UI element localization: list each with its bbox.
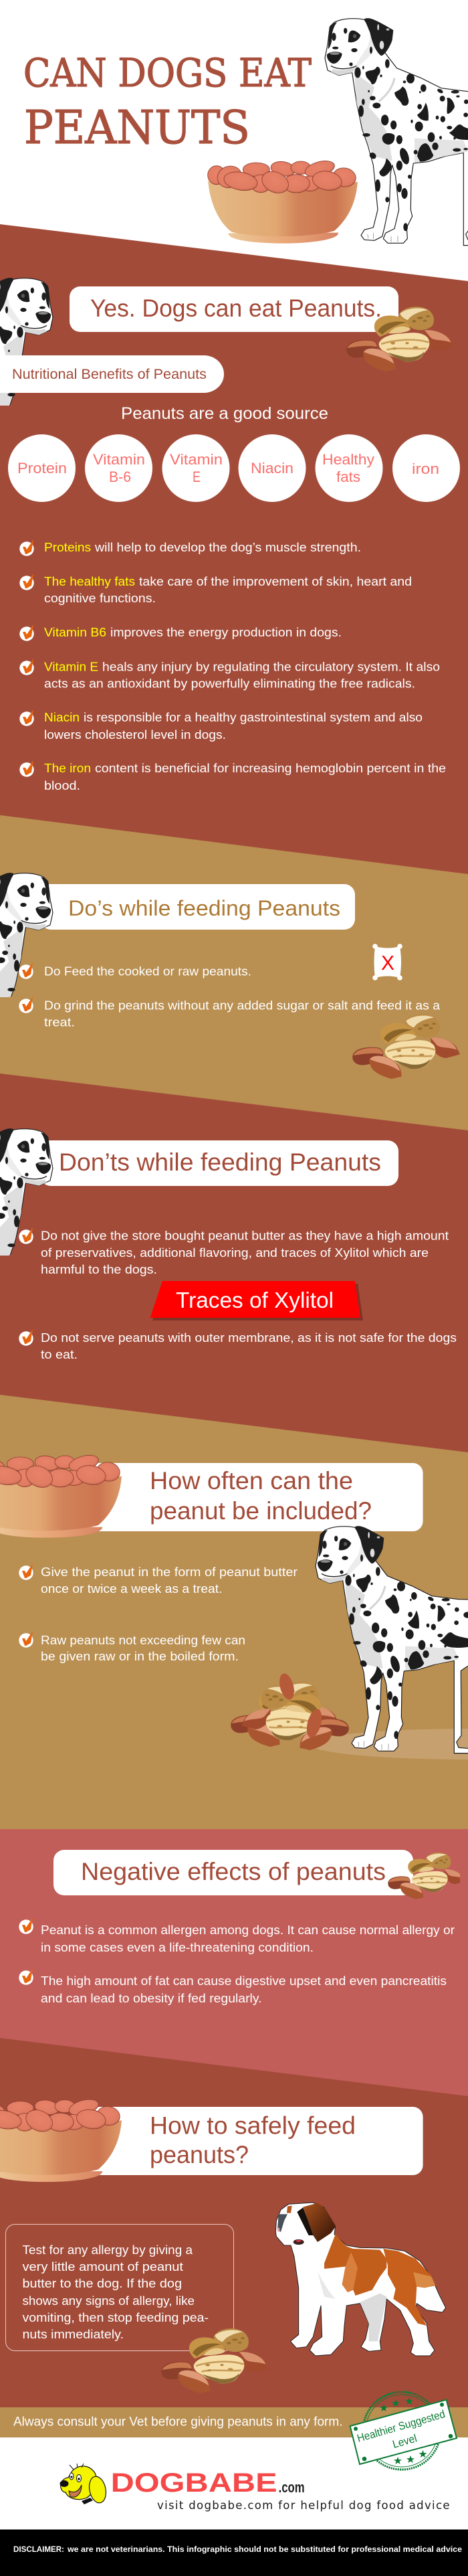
bullet: high fat: and can lead to obesity if fed regularly. [41, 1992, 262, 2005]
title: PEANUTS [24, 102, 250, 155]
list: negative effects [19, 1917, 455, 2005]
icon: dalmatian dog [316, 1526, 468, 1753]
circle: niacin: Niacin [251, 460, 294, 477]
heading: how often [80, 1463, 423, 1531]
footer: disclaimer: we are not veterinarians. This infographic should not be substituted for professional medical advice [67, 2546, 462, 2554]
bullet: proteins [19, 539, 361, 556]
icon: dalmatian dog [325, 18, 468, 246]
panel: tan section how often [0, 1395, 468, 1829]
panel: rose section negative effects [0, 1829, 468, 2096]
bullet: raw peanuts [19, 1631, 245, 1663]
text box: allergy test: Test for any allergy by giving a [23, 2243, 193, 2257]
heading: yes [70, 286, 398, 332]
bullet: proteins: Proteins [44, 541, 91, 554]
bullet: outer membrane: to eat. [41, 1348, 78, 1361]
heading: how to safely feed: peanuts? [150, 2141, 249, 2168]
bullet: iron [19, 760, 446, 792]
bullet: outer membrane [19, 1329, 457, 1361]
bullet: store bought butter: harmful to the dogs. [41, 1263, 157, 1276]
bullet: grind: treat. [44, 1016, 75, 1029]
shadow under dog [309, 1729, 468, 1759]
circle: iron [392, 434, 460, 502]
bullet: niacin: Niacin [44, 711, 80, 724]
circle: vitamin E: E [193, 468, 201, 485]
circle: iron: iron [412, 460, 439, 477]
bullet: vitamin B6 [19, 624, 342, 641]
banner: consult your vet: Always consult your Vet before giving peanuts in any form. [13, 2415, 342, 2429]
bullet: iron: content is beneficial for increasing hemoglobin percent in the [95, 762, 446, 775]
bullet: vitamin B6: improves the energy production in dogs. [110, 626, 342, 639]
bullet: vitamin E: acts as an antioxidant by powerfully eliminating the free radicals. [44, 677, 415, 691]
bullet: niacin [19, 709, 423, 742]
heading: negative effects [53, 1850, 413, 1895]
bullet: healthy fats: take care of the improvement of skin, heart and [139, 575, 412, 588]
text box: allergy test: nuts immediately. [23, 2328, 124, 2341]
circle: protein [8, 434, 76, 502]
bullet: grind: Do grind the peanuts without any added sugar or salt and feed it as a [44, 999, 441, 1012]
bullet: cooked or raw: Do Feed the cooked or raw peanuts. [44, 965, 251, 978]
bullet: high fat [19, 1968, 447, 2005]
bullet: allergen: in some cases even a life-threatening condition. [41, 1941, 314, 1954]
banner: consult your vet [0, 2407, 468, 2437]
circle: protein: Protein [17, 460, 67, 477]
icon: bowl [0, 2097, 122, 2182]
bullet: twice a week: once or twice a week as a treat. [41, 1582, 222, 1596]
nutrient circles [8, 434, 460, 502]
heading: negative effects: Negative effects of peanuts [81, 1858, 386, 1885]
icon: peanut pile [231, 1672, 349, 1750]
bullet: healthy fats: cognitive functions. [44, 592, 156, 605]
bullet: vitamin E: heals any injury by regulating the circulatory system. It also [102, 660, 440, 673]
circle: healthy fats: fats [336, 468, 360, 485]
footer: disclaimer: DISCLAIMER: [13, 2546, 64, 2554]
heading: how to safely feed: How to safely feed [150, 2112, 356, 2139]
heading: don'ts [40, 1140, 398, 1186]
logo: dogbabe: .com [279, 2479, 305, 2496]
logo: dogbabe: visit dogbabe.com for helpful dog food advice [157, 2499, 449, 2512]
text box: allergy test: vomiting, then stop feeding pea- [23, 2311, 209, 2324]
callout: traces of xylitol [150, 1281, 363, 1320]
title [23, 50, 312, 155]
icon: peanut cluster [346, 307, 454, 371]
heading: do's [40, 884, 355, 930]
circle: vitamin B-6: B-6 [109, 468, 131, 485]
icon: crossed sack [372, 944, 402, 980]
heading: how often: peanut be included? [150, 1497, 372, 1525]
bullet: store bought butter: Do not give the store bought peanut butter as they have a high amount [41, 1229, 449, 1242]
circle: healthy fats [316, 434, 382, 502]
heading: how to safely feed [80, 2107, 423, 2175]
heading: don'ts: Don’ts while feeding Peanuts [59, 1148, 381, 1176]
heading: nutritional benefits: Nutritional Benefits of Peanuts [12, 367, 207, 382]
icon: crossed sack: X [381, 951, 394, 974]
logo: dogbabe [60, 2464, 449, 2512]
heading: how often: How often can the [150, 1467, 353, 1494]
logo: dogbabe: DOGBABE [111, 2468, 277, 2498]
heading: nutritional benefits [0, 355, 224, 393]
bullet: iron: The iron [44, 762, 91, 775]
bullet: outer membrane: Do not serve peanuts with outer membrane, as it is not safe for the dogs [41, 1331, 457, 1345]
bullet: store bought butter [19, 1227, 449, 1276]
icon: peeking dog 3 [0, 1128, 53, 1256]
icon: bowl of peanuts [208, 158, 358, 244]
footer: disclaimer [0, 2530, 468, 2576]
bullet: allergen: Peanut is a common allergen among dogs. It can cause normal allergy or [41, 1923, 455, 1937]
bullet: high fat: The high amount of fat can cause digestive upset and even pancreatitis [41, 1974, 447, 1988]
icon: bowl [0, 1452, 122, 1538]
icon: peeking dog 1 [0, 278, 53, 406]
bullet: iron: blood. [44, 779, 80, 792]
bullet: raw peanuts: Raw peanuts not exceeding few can [41, 1634, 245, 1647]
circle: healthy fats: Healthy [322, 451, 374, 468]
heading: yes: Yes. Dogs can eat Peanuts. [90, 294, 382, 322]
bullet: twice a week [19, 1563, 298, 1596]
stamp: healthier suggested level: Level [391, 2432, 419, 2451]
circle: niacin [238, 434, 306, 502]
icon: peeking dog 2 [0, 873, 53, 997]
text box: allergy test [5, 2225, 234, 2350]
bullet: cooked or raw [19, 962, 251, 979]
list: do's [19, 962, 441, 1029]
callout: traces of xylitol: Traces of Xylitol [176, 1288, 334, 1312]
text box: allergy test: very little amount of peanut [23, 2260, 183, 2273]
icon: yellow dog mascot [60, 2464, 108, 2504]
circle: vitamin B-6 [85, 434, 152, 502]
bullet: grind [19, 997, 441, 1029]
stamp: healthier suggested level [350, 2392, 457, 2470]
bullet: raw peanuts: be given raw or in the boiled form. [41, 1650, 239, 1663]
circle: vitamin B-6: Vitamin [93, 451, 145, 468]
bullet: store bought butter: of preservatives, additional flavoring, and traces of Xylitol which are [41, 1246, 429, 1260]
icon: peanut cluster [352, 1014, 460, 1079]
panel: tan section do's [0, 815, 468, 1130]
bullet: vitamin E: Vitamin E [44, 660, 98, 673]
bullet: vitamin E [19, 659, 440, 691]
bullet: healthy fats [19, 574, 412, 605]
heading: do's: Do’s while feeding Peanuts [68, 896, 340, 920]
text box: allergy test: shows any signs of allergy, like [23, 2294, 195, 2308]
icon: st bernard dog [275, 2203, 446, 2356]
bullet: allergen [19, 1917, 455, 1954]
list: nutritional benefits [19, 539, 446, 792]
circle: vitamin E: Vitamin [170, 451, 223, 468]
bullet: vitamin B6: Vitamin B6 [44, 626, 106, 639]
bullet: niacin: is responsible for a healthy gastrointestinal system and also [84, 711, 423, 724]
bullet: niacin: lowers cholesterol level in dogs. [44, 728, 226, 742]
bullet: twice a week: Give the peanut in the form of peanut butter [41, 1565, 298, 1579]
text: peanuts are a good source: Peanuts are a good source [121, 404, 328, 423]
icon: peanut cluster [161, 2328, 269, 2393]
stamp: healthier suggested level: Healthier Suggested [356, 2408, 447, 2445]
bullet: proteins: will help to develop the dog’s muscle strength. [94, 541, 361, 554]
bullet: healthy fats: The healthy fats [44, 575, 135, 588]
list: how often [19, 1563, 298, 1663]
title: CAN DOGS EAT [23, 50, 312, 96]
circle: vitamin E [162, 434, 230, 502]
icon: peanut cluster [388, 1853, 465, 1899]
text box: allergy test: butter to the dog. If the dog [23, 2277, 182, 2290]
